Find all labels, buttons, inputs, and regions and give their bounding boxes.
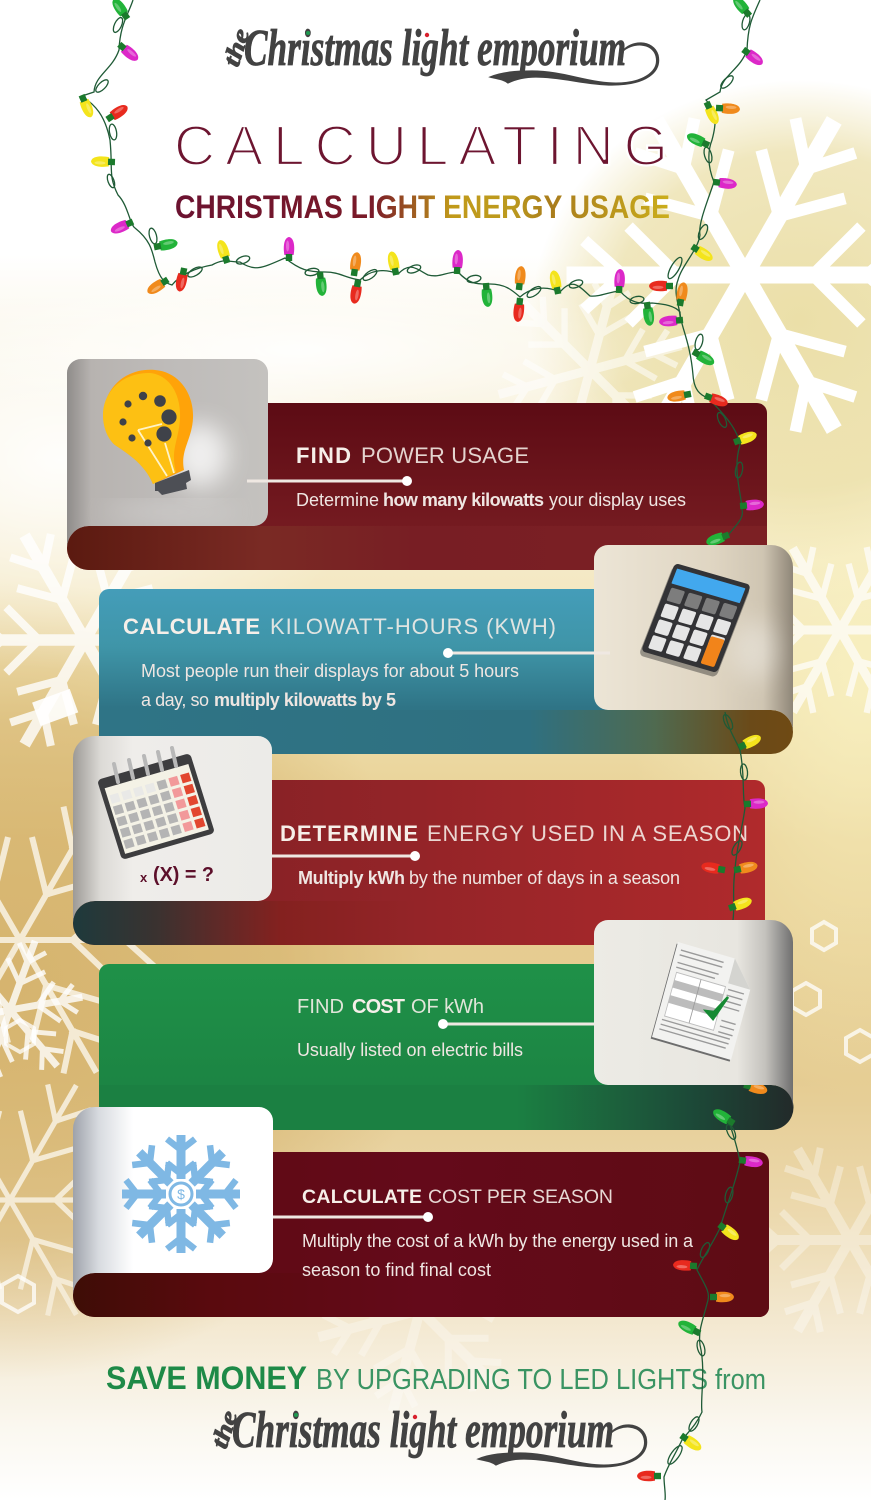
icon: check mark — [706, 997, 728, 1019]
heading: find power usage: POWER USAGE — [361, 443, 529, 468]
text: run displays 5 hours: multiply kilowatts by 5 — [214, 690, 396, 710]
heading: determine energy used in a season — [280, 821, 748, 846]
icon: snowflake with dollar: $ — [177, 1186, 185, 1202]
icon: calculator — [639, 563, 752, 678]
formula: x (X) = ?: (X) = ? — [153, 864, 214, 886]
logo: bottom: the — [207, 1407, 244, 1452]
heading: find cost of kwh: COST — [352, 996, 405, 1018]
connector line: step 1 — [247, 476, 412, 486]
footer: save money: BY UPGRADING TO LED LIGHTS from — [316, 1364, 766, 1396]
text: multiply cost by energy: season to find final cost — [302, 1260, 491, 1280]
panel: calculate kilowatt-hours — [99, 589, 793, 754]
heading: find power usage: FIND — [296, 443, 351, 468]
text: run displays 5 hours: Most people run their displays for about 5 hours — [141, 661, 519, 681]
text: determine kilowatts: your display uses — [549, 490, 686, 510]
heading: find cost of kwh: FIND — [297, 996, 344, 1018]
text: determine kilowatts — [296, 490, 686, 510]
icon: bill document — [651, 942, 757, 1062]
icon: calendar — [97, 748, 215, 860]
heading: find cost of kwh: OF kWh — [411, 996, 484, 1018]
tab: document — [594, 920, 793, 1107]
heading: determine energy used in a season: DETERMINE — [280, 821, 418, 846]
heading: calculate cost per season: COST PER SEASON — [428, 1186, 613, 1208]
title: calculating: CALCULATING — [174, 114, 668, 178]
text: multiply cost by energy — [302, 1231, 694, 1280]
tab: snowflake — [73, 1107, 273, 1295]
text: run displays 5 hours: a day, so — [141, 690, 209, 710]
text: run displays 5 hours — [141, 661, 519, 710]
text: multiply kwh by days: Multiply kWh — [298, 868, 405, 888]
logo: top — [219, 20, 659, 85]
panel: find power usage — [67, 403, 767, 570]
subtitle: christmas light energy usage: CHRISTMAS LIGHT ENERGY USAGE — [175, 189, 670, 225]
formula: x (X) = ?: x — [140, 870, 148, 885]
connector line: step 3 — [272, 851, 420, 861]
tab: calendar — [73, 736, 272, 923]
connector line: step 5 — [273, 1212, 433, 1222]
icon: snowflake with dollar — [122, 1135, 240, 1253]
heading: calculate cost per season: CALCULATE — [302, 1186, 422, 1208]
tab: light bulb — [67, 359, 268, 548]
icon: light bulb — [103, 370, 193, 495]
text: listed on electric bills: Usually listed on electric bills — [297, 1040, 523, 1060]
panel: find cost of kwh — [99, 964, 794, 1130]
heading: calculate kilowatt-hours: CALCULATE — [123, 614, 260, 639]
text: multiply kwh by days: by the number of days in a season — [409, 868, 680, 888]
text: determine kilowatts: how many kilowatts — [383, 490, 544, 510]
heading: determine energy used in a season: ENERGY USED IN A SEASON — [427, 821, 748, 846]
heading: calculate cost per season — [302, 1186, 613, 1208]
logo: bottom: Christmas light emporium — [232, 1402, 614, 1459]
garland: string lights — [77, 0, 769, 1500]
connector line: step 2 — [443, 648, 610, 658]
text: multiply cost by energy: Multiply the cost of a kWh by the energy used in a — [302, 1231, 694, 1251]
connector line: step 4 — [438, 1019, 594, 1029]
panel: calculate cost per season — [73, 1152, 769, 1317]
logo: top: Christmas light emporium — [244, 20, 626, 77]
logo: top: the — [219, 25, 256, 70]
heading: calculate kilowatt-hours — [123, 614, 556, 639]
panel: determine energy used — [73, 780, 765, 945]
logo: bottom — [207, 1402, 647, 1467]
footer: save money: SAVE MONEY — [106, 1360, 307, 1396]
tab: calculator — [594, 545, 793, 732]
footer: save money — [106, 1360, 766, 1396]
heading: find cost of kwh — [297, 996, 484, 1018]
text: determine kilowatts: Determine — [296, 490, 379, 510]
heading: calculate kilowatt-hours: KILOWATT-HOURS (KWH) — [270, 614, 556, 639]
